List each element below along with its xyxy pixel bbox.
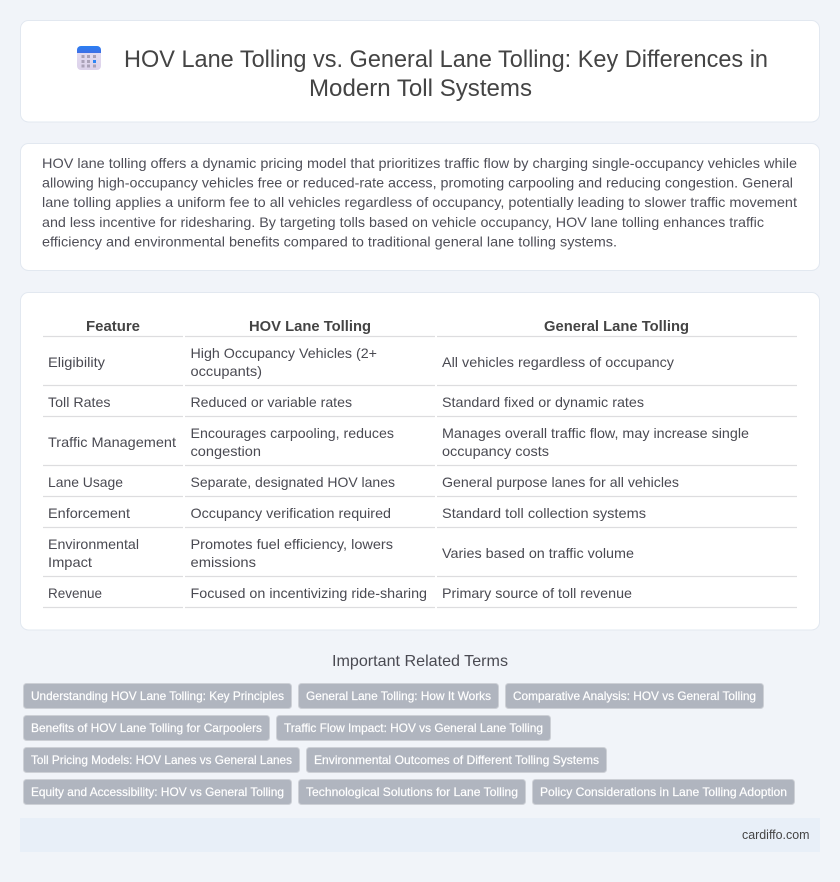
panel: header (20, 20, 820, 122)
tag (24, 716, 270, 740)
tag (24, 780, 292, 804)
row: revenue: Focused on incentivizing ride-sharing (190, 585, 427, 601)
tag: Environmental Outcomes of Different Tolling Systems (314, 753, 599, 767)
table header row: HOV Lane Tolling (249, 319, 371, 335)
panel: comparison table (20, 292, 820, 630)
title (124, 46, 768, 102)
tag: Benefits of HOV Lane Tolling for Carpoolers (31, 721, 262, 735)
row: toll rates: Toll Rates (48, 394, 110, 410)
row: environmental impact: Environmental (48, 536, 139, 552)
row: enforcement: Enforcement (48, 505, 130, 521)
tag (24, 748, 300, 772)
row: lane usage: General purpose lanes for all vehicles (442, 474, 679, 490)
table header row (86, 319, 689, 335)
row: environmental impact: emissions (190, 554, 256, 570)
row: eligibility: occupants) (190, 363, 262, 379)
row: environmental impact: Impact (48, 554, 92, 570)
tag: Traffic Flow Impact: HOV vs General Lane Tolling (284, 721, 543, 735)
row: enforcement: Standard toll collection systems (442, 505, 646, 521)
icon: calendar (77, 46, 101, 70)
row: environmental impact: Promotes fuel efficiency, lowers (190, 536, 393, 552)
tag: Comparative Analysis: HOV vs General Tolling (513, 689, 756, 703)
row: revenue: Revenue (48, 585, 102, 601)
row: eligibility: All vehicles regardless of occupancy (442, 354, 674, 370)
intro paragraph: lane tolling applies a uniform fee to all vehicles regardless of occupancy, potentially leading to slower traffic movement (42, 194, 797, 210)
row: enforcement: Occupancy verification required (190, 505, 391, 521)
tag: General Lane Tolling: How It Works (306, 689, 491, 703)
row: eligibility (48, 345, 674, 379)
tag: Technological Solutions for Lane Tolling (306, 785, 518, 799)
row: toll rates: Standard fixed or dynamic rates (442, 394, 644, 410)
tag: Toll Pricing Models: HOV Lanes vs General Lanes (31, 753, 292, 767)
row: eligibility: High Occupancy Vehicles (2+ (190, 345, 377, 361)
panel: related term tags (24, 684, 794, 804)
intro paragraph: HOV lane tolling offers a dynamic pricing model that prioritizes traffic flow by charging single-occupancy vehicles while (42, 155, 797, 171)
row: traffic management: Encourages carpooling, reduces (190, 425, 394, 441)
footer: cardiffo.com (742, 827, 810, 842)
row: traffic management: Manages overall traffic flow, may increase single (442, 425, 749, 441)
row: toll rates (48, 394, 644, 410)
row: traffic management: occupancy costs (442, 443, 549, 459)
heading: important related terms: Important Related Terms (332, 653, 508, 670)
intro paragraph: and less incentive for ridesharing. By targeting tolls based on vehicle occupancy, HOV lane tolling enhances traffic (42, 214, 764, 230)
intro paragraph: allowing high-occupancy vehicles free or reduced-rate access, promoting carpooling and reducing congestion. General (42, 175, 793, 191)
tag: Understanding HOV Lane Tolling: Key Principles (31, 689, 284, 703)
tag (306, 748, 606, 772)
row: enforcement (48, 505, 646, 521)
table header row: General Lane Tolling (544, 319, 689, 335)
table header row: Feature (86, 319, 140, 335)
tag (506, 684, 764, 708)
row: traffic management: congestion (190, 443, 261, 459)
panel: introduction (20, 144, 820, 270)
row: revenue: Primary source of toll revenue (442, 585, 632, 601)
intro paragraph: efficiency and environmental benefits compared to traditional general lane tolling systems. (42, 233, 617, 249)
footer (20, 818, 820, 852)
tag (298, 684, 498, 708)
row: lane usage (48, 474, 679, 490)
tag (276, 716, 550, 740)
row: revenue (48, 585, 632, 601)
row: eligibility: Eligibility (48, 354, 105, 370)
row: lane usage: Lane Usage (48, 474, 123, 490)
row: environmental impact: Varies based on traffic volume (442, 545, 634, 561)
title: HOV Lane Tolling vs. General Lane Tolling: Key Differences in (124, 46, 768, 73)
row: traffic management: Traffic Management (48, 434, 176, 450)
tag: Policy Considerations in Lane Tolling Adoption (540, 785, 787, 799)
row: environmental impact (48, 536, 634, 570)
tag (298, 780, 526, 804)
tag: Equity and Accessibility: HOV vs General Tolling (31, 785, 284, 799)
tag (24, 684, 292, 708)
row: toll rates: Reduced or variable rates (190, 394, 352, 410)
title: Modern Toll Systems (309, 75, 532, 102)
tag (532, 780, 794, 804)
intro paragraph (42, 155, 797, 249)
row: traffic management (48, 425, 749, 459)
row: lane usage: Separate, designated HOV lanes (190, 474, 395, 490)
